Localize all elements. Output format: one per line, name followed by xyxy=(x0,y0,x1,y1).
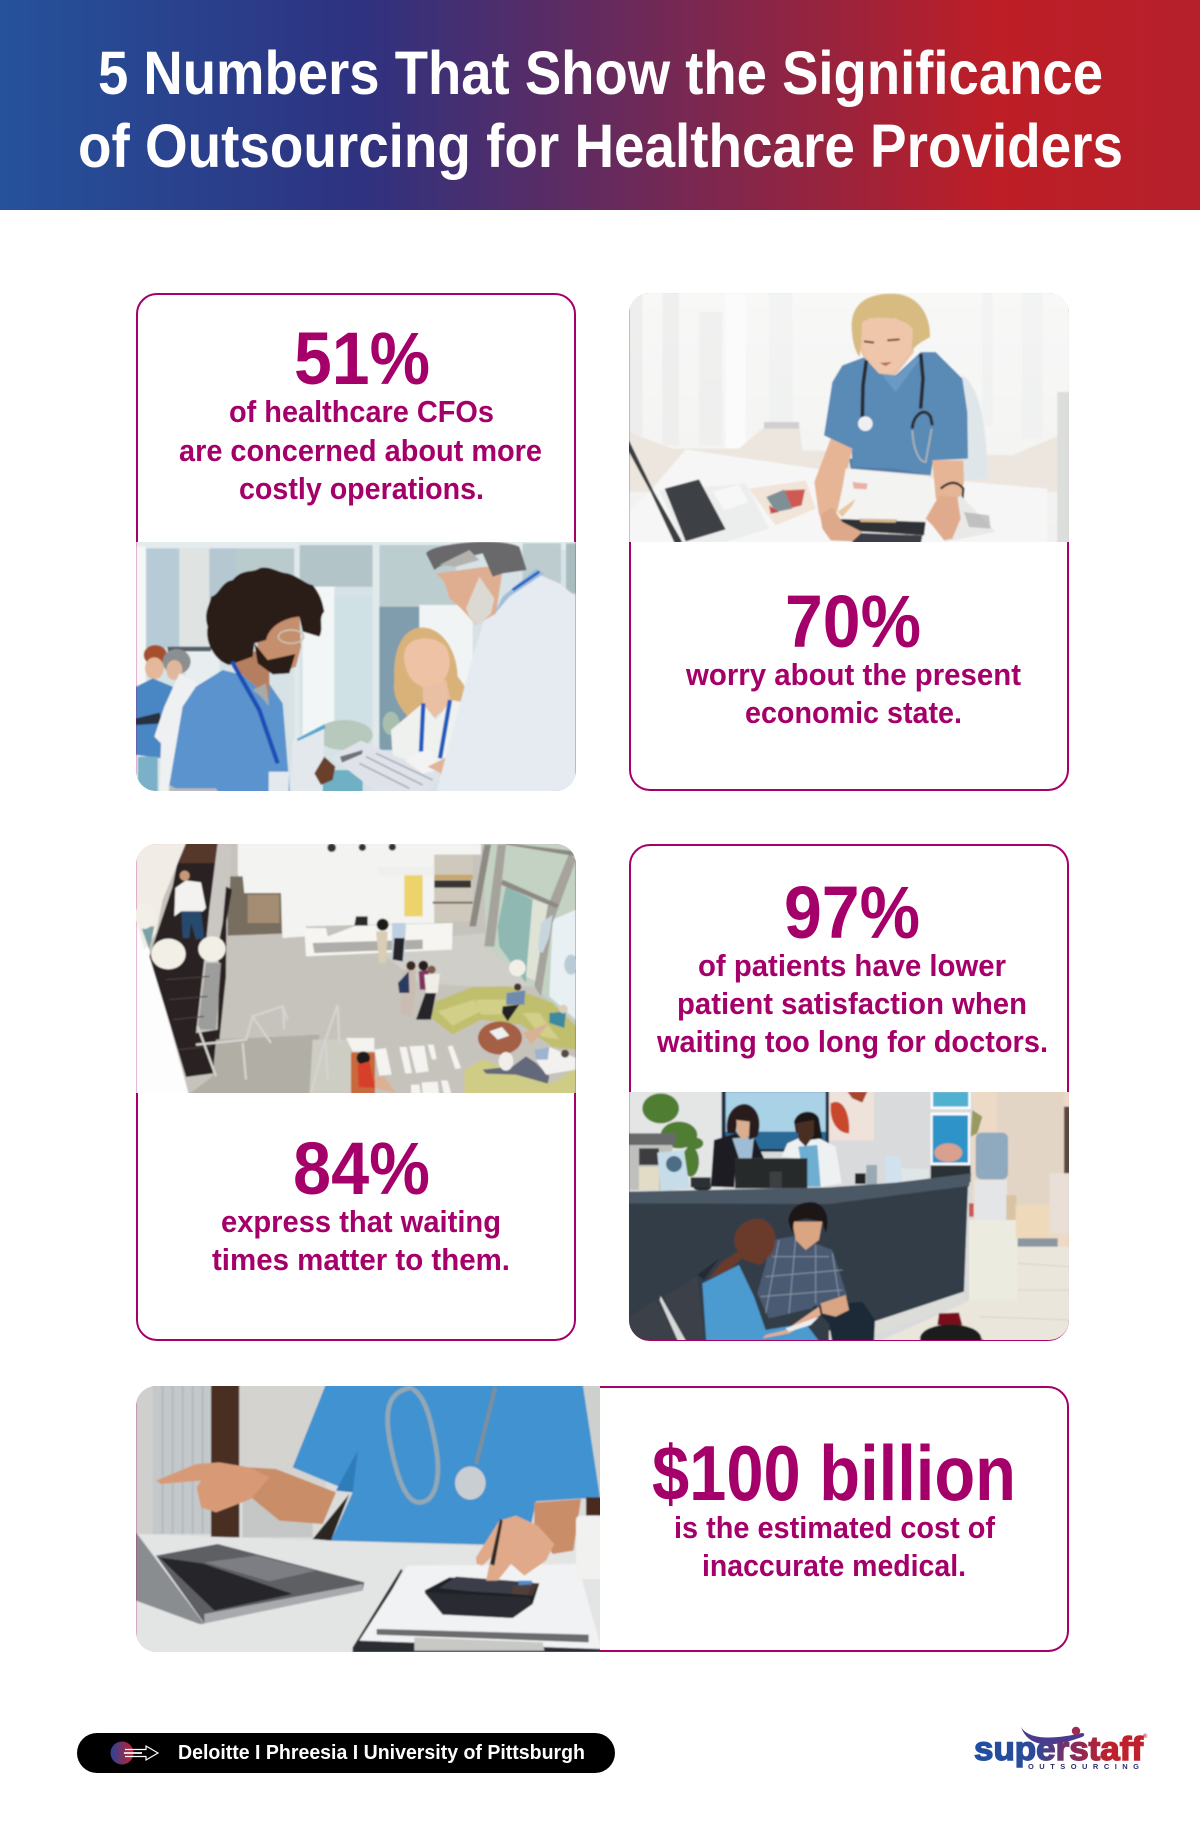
floor xyxy=(874,1247,1070,1343)
main man xyxy=(169,670,290,793)
icon: gradient circle with arrow xyxy=(110,1742,158,1764)
sunlight patches xyxy=(346,1038,461,1096)
statistic: 70%: 70% xyxy=(785,580,921,663)
papers and clipboard xyxy=(837,468,930,510)
text block: cost description: inaccurate medical. xyxy=(702,1548,966,1583)
standing group xyxy=(400,970,416,1016)
photo: nurse reading clipboard at desk xyxy=(629,292,1070,545)
woman on orange chair xyxy=(351,1052,375,1094)
logo: Superstaff Outsourcing: superstaff xyxy=(974,1730,1144,1767)
text block: 97% description: waiting too long for doctors. xyxy=(656,1024,1048,1059)
text block: 51% description: costly operations. xyxy=(239,471,484,506)
window wall xyxy=(483,843,576,1023)
text block: 51% description xyxy=(179,394,542,506)
water cooler xyxy=(976,1133,1008,1179)
papers and clipboard xyxy=(353,1569,601,1653)
staff xyxy=(711,1133,764,1187)
text block: 70% description: worry about the present xyxy=(685,657,1021,692)
man on stairs xyxy=(180,871,190,881)
text block: 51% description: of healthcare CFOs xyxy=(229,394,494,429)
white left wall and stairs xyxy=(136,920,189,1096)
stethoscope xyxy=(388,1387,438,1502)
folder and hand xyxy=(290,725,324,793)
panel: 84% waiting times xyxy=(134,843,578,1340)
photo: nurse using calculator xyxy=(136,1384,603,1654)
text block: 97% description: patient satisfaction when xyxy=(677,986,1027,1021)
photo: hospital reception desk xyxy=(629,1090,1070,1352)
sources text: Deloitte I Phreesia I University of Pittsburgh xyxy=(178,1742,585,1764)
back people xyxy=(144,645,167,665)
statistic: 51%: 51% xyxy=(294,317,430,400)
panel: 97% of patients lower satisfaction xyxy=(629,845,1070,1352)
printer and brochure xyxy=(629,1138,672,1190)
blonde woman xyxy=(394,627,468,720)
panel: $100 billion xyxy=(136,1384,1068,1654)
right arm and hand xyxy=(534,1499,581,1554)
document xyxy=(331,741,443,793)
header banner with title xyxy=(0,0,1200,210)
left arm and hand xyxy=(249,1467,336,1524)
scrubs xyxy=(293,1384,600,1546)
nurse xyxy=(849,459,931,475)
panel: 70% worry about economy xyxy=(629,292,1070,790)
seated man xyxy=(757,1236,847,1318)
statistic: 97%: 97% xyxy=(784,871,920,954)
photo: hospital lobby from above xyxy=(134,843,578,1096)
reception desk xyxy=(304,923,453,956)
statistic: $100 billion: $100 billion xyxy=(652,1429,1016,1517)
panel: 51% of healthcare CFOs xyxy=(136,294,576,793)
text block: 70% description xyxy=(685,657,1021,730)
anatomy paper xyxy=(749,480,816,525)
text block: 84% description: express that waiting xyxy=(221,1204,501,1239)
calculator xyxy=(424,1577,539,1618)
statistic: 84%: 84% xyxy=(293,1127,430,1210)
foreground head xyxy=(937,1313,962,1325)
bottle xyxy=(586,1497,603,1516)
lower sofa and people xyxy=(464,1060,576,1096)
sources pill xyxy=(77,1733,615,1773)
text block: 84% description xyxy=(212,1204,510,1277)
text block: 70% description: economic state. xyxy=(745,695,962,730)
plant xyxy=(642,1093,703,1177)
nurse xyxy=(702,1265,821,1343)
text block: 97% description xyxy=(656,948,1048,1059)
photo: doctors reviewing a document xyxy=(136,540,576,793)
waiting chairs xyxy=(630,1302,676,1340)
pendant lamps xyxy=(151,939,186,969)
text block: 51% description: are concerned about more xyxy=(179,433,542,468)
lower left steps and rails xyxy=(186,1035,319,1096)
laptop xyxy=(629,440,682,545)
logo: Superstaff Outsourcing: OUTSOURCING xyxy=(1028,1762,1139,1771)
reception desk xyxy=(629,1173,971,1205)
desk xyxy=(136,1534,603,1654)
wall screen and posters xyxy=(722,1090,829,1152)
text block: 84% description: times matter to them. xyxy=(212,1242,510,1277)
back wall xyxy=(238,843,481,938)
title xyxy=(78,39,1123,180)
senior doctor xyxy=(436,573,576,793)
sofa and table xyxy=(431,986,576,1050)
title: 5 Numbers That Show the Significance xyxy=(98,39,1103,107)
laptop xyxy=(136,1532,204,1624)
text block: cost description xyxy=(674,1510,996,1583)
text block: 97% description: of patients have lower xyxy=(698,948,1006,983)
logo: Superstaff Outsourcing: ® xyxy=(1143,1733,1148,1740)
text block: cost description: is the estimated cost of xyxy=(674,1510,996,1545)
